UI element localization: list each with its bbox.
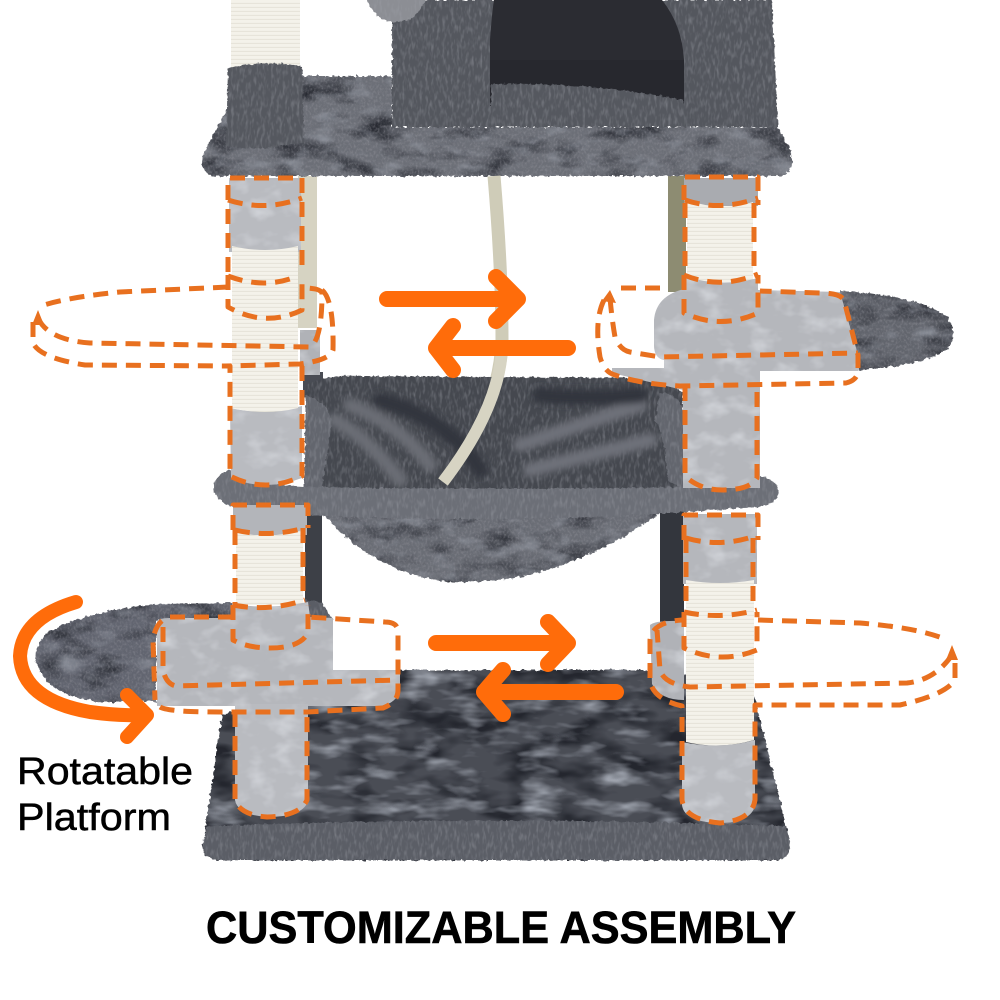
arrow pair: lower right-pointing — [436, 622, 568, 664]
rope — [443, 176, 502, 482]
base — [203, 670, 790, 860]
cat tree illustration — [36, 0, 953, 860]
hammock back — [304, 376, 686, 498]
top platform — [202, 76, 792, 176]
condo opening — [490, 0, 684, 106]
left upper sisal — [232, 246, 298, 412]
lower left platform cap — [305, 600, 333, 620]
dashed guides: left upper — [33, 178, 333, 485]
top sisal post — [231, 0, 300, 68]
hammock — [214, 376, 778, 582]
rotatable platform label: Platform — [17, 797, 171, 839]
title: CUSTOMIZABLE ASSEMBLY — [206, 902, 796, 953]
rotation arrow — [20, 602, 147, 737]
lower left platform dark end — [36, 603, 233, 702]
dashed guides: left lower — [153, 505, 398, 817]
upper right platform dark end — [840, 291, 953, 370]
left lower post — [233, 505, 307, 605]
lower right post — [650, 514, 757, 823]
hammock side gather — [304, 392, 684, 490]
condo body — [392, 0, 778, 127]
dashed guides: right upper — [598, 177, 858, 490]
dashed guides: right lower — [650, 515, 955, 823]
rotatable platform label: Rotatable — [17, 751, 193, 793]
arrow pair: upper left-pointing — [436, 326, 568, 370]
upper right post — [684, 178, 758, 282]
back support posts — [298, 176, 686, 630]
opening floor fur — [491, 84, 684, 126]
arrow pair: upper right-pointing — [387, 277, 518, 321]
lower left post bottom — [235, 704, 308, 817]
lower left platform light — [157, 602, 400, 706]
left upper post — [229, 178, 320, 485]
top left cuff — [226, 63, 304, 148]
hammock bag — [312, 500, 676, 582]
upper right platform light — [612, 276, 858, 488]
rope over hammock — [443, 350, 502, 482]
hammock folds — [335, 395, 650, 480]
dashed guide arrowheads — [32, 290, 958, 660]
lower right sisal — [686, 580, 754, 746]
base front band — [203, 820, 790, 860]
hanging ball — [366, 0, 426, 22]
arrow pair: lower left-pointing — [484, 670, 616, 714]
hammock rim — [214, 469, 778, 519]
